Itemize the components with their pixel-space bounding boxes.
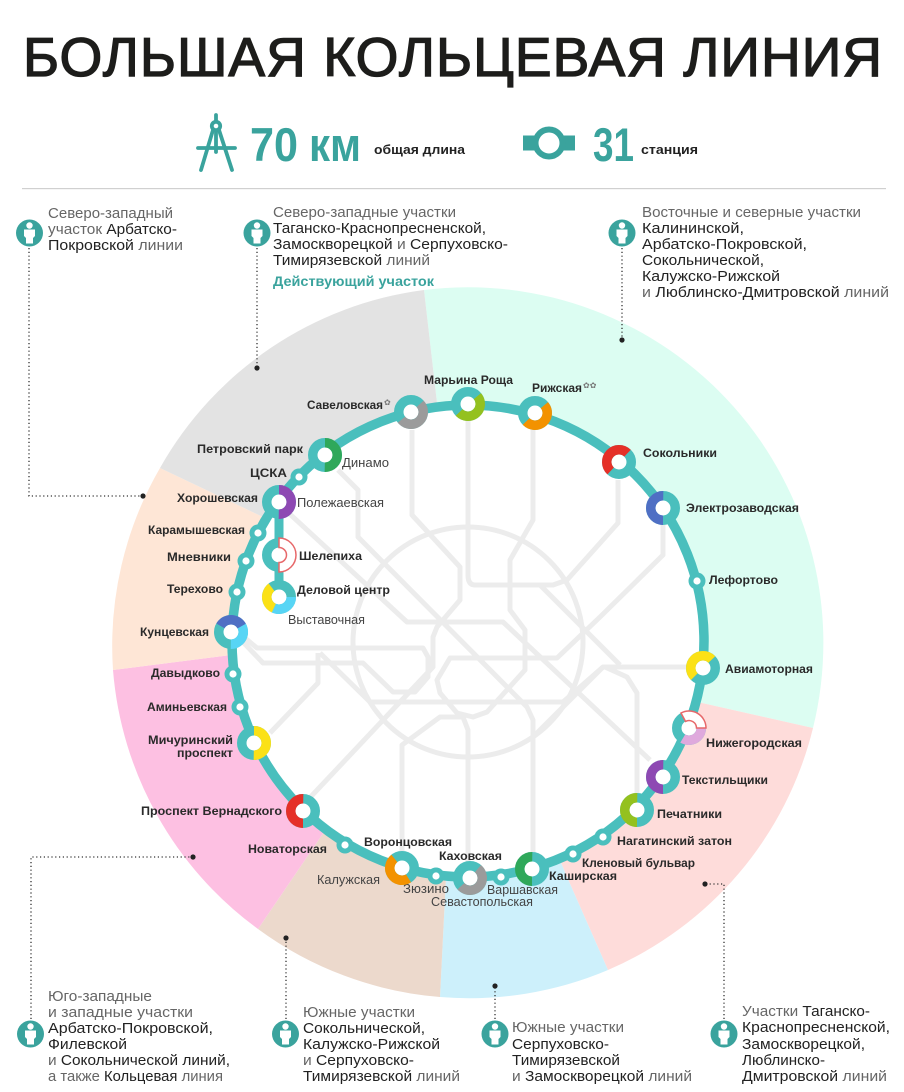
station: Карамышевская: [148, 523, 266, 542]
station: Новаторская: Новаторская: [248, 842, 327, 856]
icon: compass: [198, 115, 235, 170]
icon: person: [17, 1020, 44, 1048]
callout text: участок Арбатско-: [48, 222, 177, 238]
leader line: [494, 988, 496, 1019]
callout text: и Серпуховско-: [303, 1053, 414, 1069]
station: Нижегородская: [677, 711, 802, 750]
station: Воронцовская / Калужская: Калужская: [317, 873, 380, 887]
callout text: [303, 1005, 460, 1085]
station: Авиамоторная: Авиамоторная: [725, 662, 813, 676]
callout text: Дмитровской линий: [742, 1069, 887, 1085]
station: Шелепиха: [267, 538, 362, 572]
station: Проспект Вернадского: [141, 799, 315, 823]
sector: south beige: [258, 641, 468, 997]
callout text: Замоскворецкой и Серпуховско-: [273, 237, 508, 253]
sector: south: [440, 641, 608, 998]
panel: sector map: [112, 287, 823, 998]
station: Сокольники: [602, 445, 717, 479]
station: Зюзино: Зюзино: [403, 882, 449, 896]
station: Кунцевская: [140, 615, 248, 649]
callout: south Sokolnicheskaya: [272, 935, 460, 1085]
station: Новаторская: [248, 836, 354, 856]
callout: east and north: [608, 205, 889, 343]
station: Лефортово: Лефортово: [709, 573, 778, 587]
icon: person: [608, 220, 636, 246]
station: Кленовый бульвар: Кленовый бульвар: [582, 856, 695, 870]
leader line: [285, 940, 287, 1019]
station: Давыдково: [151, 666, 242, 682]
station: Нагатинский затон: [594, 828, 732, 848]
branch line: [274, 510, 284, 590]
callout text: Тимирязевской: [512, 1053, 620, 1069]
callout text: Южные участки: [512, 1020, 624, 1036]
icon: station: [523, 130, 575, 156]
station: Савеловская: [307, 395, 428, 429]
callout text: Сокольнической,: [642, 253, 764, 269]
station: Каховская / Севастопольская: Каховская: [439, 849, 502, 863]
station: Кленовый бульвар: [564, 846, 695, 870]
callout text: Тимирязевской линий: [303, 1069, 460, 1085]
icon: person: [272, 1020, 299, 1048]
station: Рижская: [518, 381, 597, 430]
station: Деловой центр / Выставочная: [263, 581, 390, 627]
icon: person: [244, 220, 270, 246]
callout text: и Замоскворецкой линий: [512, 1069, 692, 1085]
station: Мневники: Мневники: [167, 550, 231, 564]
station: Мичуринский проспект: проспект: [177, 746, 233, 760]
callout: north-west operating section: [244, 205, 508, 371]
stat: total length: км: [309, 118, 361, 171]
station: Хорошевская / Полежаевская: Хорошевская: [177, 491, 258, 505]
sector: east and north: [424, 287, 823, 728]
station: Электрозаводская: Электрозаводская: [686, 501, 799, 515]
station: Деловой центр / Выставочная: Деловой центр: [297, 583, 390, 597]
station: Каховская / Севастопольская: Севастопольская: [431, 895, 533, 909]
station: Печатники: [625, 798, 722, 822]
station: Текстильщики: [651, 765, 768, 789]
sector: south-east: [468, 641, 813, 970]
station: Варшавская: [487, 868, 558, 897]
callout text: Калужско-Рижской: [303, 1037, 440, 1053]
callout text: Тимирязевской линий: [273, 253, 430, 269]
callout text: Таганско-Краснопресненской,: [273, 221, 486, 237]
station: Аминьевская: Аминьевская: [147, 700, 227, 714]
leader line: [707, 884, 724, 1019]
callout text: а также Кольцевая линия: [48, 1069, 223, 1085]
station: Нагатинский затон: Нагатинский затон: [617, 834, 732, 848]
callout text: и западные участки: [48, 1005, 193, 1021]
station: Лефортово: [688, 572, 778, 590]
station: Петровский парк / Динамо: [197, 442, 389, 470]
callout text: Калининской,: [642, 221, 744, 237]
callout text: [742, 1004, 890, 1085]
stat: total length: 70: [250, 118, 298, 171]
station: Электрозаводская: [651, 496, 799, 520]
icon: person: [16, 220, 43, 246]
callout text: Действующий участок: [273, 273, 435, 289]
callout: north-west Arbatsko-Pokrovskaya: [16, 206, 183, 499]
callout text: [48, 206, 183, 254]
stat: total length: общая длина: [374, 142, 466, 157]
station: Авиамоторная: [686, 651, 813, 685]
callout text: Участки Таганско-: [742, 1004, 870, 1020]
station: Рижская: ✿✿: [583, 381, 597, 390]
station: Кунцевская: Кунцевская: [140, 625, 209, 639]
callout text: Северо-западный: [48, 206, 173, 222]
callout text: Люблинско-: [742, 1053, 825, 1069]
callout: south Serpukhovsko-Timiryazevskaya: [482, 983, 692, 1085]
station: Рижская: Рижская: [532, 381, 582, 395]
callout text: Северо-западные участки: [273, 205, 456, 221]
stat: total length: [198, 115, 466, 171]
leader line: [31, 857, 191, 1019]
station: Савеловская: ✿: [384, 398, 391, 407]
station: Петровский парк / Динамо: Динамо: [342, 456, 389, 470]
station: ЦСКА: ЦСКА: [250, 466, 287, 480]
callout text: [273, 205, 508, 289]
callout text: Арбатско-Покровской,: [48, 1021, 213, 1037]
station: Воронцовская / Калужская: Воронцовская: [364, 835, 452, 849]
station: Каховская / Севастопольская: [431, 849, 533, 909]
callout text: и Сокольнической линий,: [48, 1053, 230, 1069]
callout text: Филевской: [48, 1037, 127, 1053]
leader line: [256, 248, 258, 366]
callout text: Калужско-Рижской: [642, 269, 780, 285]
icon: person: [710, 1020, 738, 1048]
callout text: и Люблинско-Дмитровской линий: [642, 285, 889, 301]
station: Каширская: Каширская: [549, 869, 617, 883]
sector: north-west: [160, 290, 468, 641]
icon: person: [482, 1020, 508, 1048]
callout text: [48, 989, 230, 1085]
callout text: Сокольнической,: [303, 1021, 425, 1037]
callout text: Краснопресненской,: [742, 1020, 890, 1036]
station: Мневники: [167, 550, 254, 570]
stat: stations: станция: [641, 142, 698, 157]
station: Хорошевская / Полежаевская: [177, 490, 384, 514]
station: Марьина Роща: [424, 373, 513, 421]
callout: south-east: [702, 881, 890, 1085]
title: БОЛЬШАЯ КОЛЬЦЕВАЯ ЛИНИЯ: [23, 26, 882, 88]
station: Воронцовская / Калужская: [317, 835, 452, 887]
sector: south-west: [113, 641, 468, 929]
callout text: Восточные и северные участки: [642, 205, 861, 221]
callout text: Арбатско-Покровской,: [642, 237, 807, 253]
station: Варшавская: Варшавская: [487, 883, 558, 897]
station: Мичуринский проспект: [148, 731, 266, 760]
station: Деловой центр / Выставочная: Выставочная: [288, 613, 365, 627]
station: Проспект Вернадского: Проспект Вернадского: [141, 804, 282, 818]
callout text: Серпуховско-: [512, 1037, 609, 1053]
station: Савеловская: Савеловская: [307, 398, 383, 412]
station: Хорошевская / Полежаевская: Полежаевская: [297, 496, 384, 510]
callout text: Покровской линии: [48, 238, 183, 254]
stat: stations: [523, 118, 698, 171]
leader line: [29, 248, 141, 496]
callout text: Южные участки: [303, 1005, 415, 1021]
callout text: [512, 1020, 692, 1085]
metro ring line: [232, 405, 704, 877]
station: Аминьевская: [147, 698, 248, 716]
callout: south-west: [17, 854, 230, 1085]
station: Шелепиха: Шелепиха: [299, 549, 362, 563]
station: Терехово: Терехово: [167, 582, 223, 596]
sector: west: [112, 468, 468, 670]
callout text: Замоскворецкой,: [742, 1037, 865, 1053]
station: Терехово: [167, 582, 246, 600]
stat: stations: 31: [593, 118, 634, 171]
station: Сокольники: Сокольники: [643, 446, 717, 460]
station: Карамышевская: Карамышевская: [148, 523, 245, 537]
station: Нижегородская: Нижегородская: [706, 736, 802, 750]
metro scheme background: [243, 410, 687, 870]
station: Текстильщики: Текстильщики: [682, 773, 768, 787]
station: Марьина Роща: Марьина Роща: [424, 373, 513, 387]
station: ЦСКА: [250, 466, 308, 486]
station: Каширская: [520, 857, 617, 883]
callout text: Юго-западные: [48, 989, 152, 1005]
station: Давыдково: Давыдково: [151, 666, 220, 680]
station: Петровский парк / Динамо: Петровский парк: [197, 442, 304, 456]
callout text: [642, 205, 889, 301]
leader line: [621, 248, 623, 338]
station: Печатники: Печатники: [657, 807, 722, 821]
station: Мичуринский проспект: Мичуринский: [148, 733, 233, 747]
station: Зюзино: [403, 868, 449, 896]
